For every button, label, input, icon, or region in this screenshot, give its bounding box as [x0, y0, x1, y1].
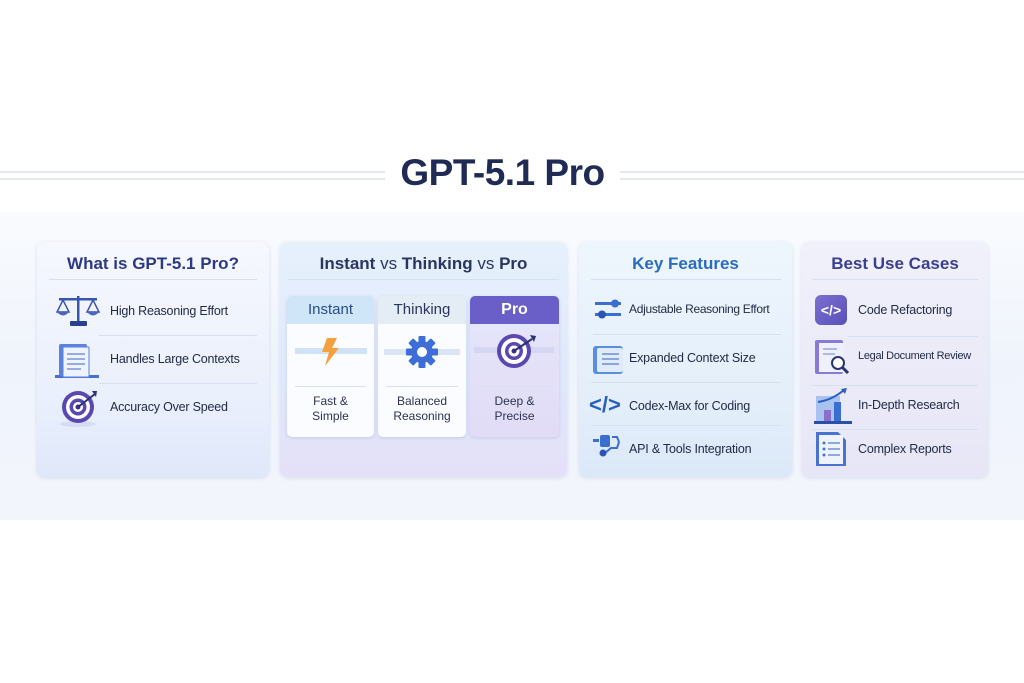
panel: Key Features: [579, 242, 792, 477]
item: Legal Document Review: [858, 350, 971, 362]
icon: code: </>: [589, 392, 621, 417]
text: [393, 394, 451, 423]
icon: code box: </>: [821, 302, 841, 318]
column: Thinking: [378, 296, 466, 437]
column: Pro: [470, 296, 559, 437]
icon: lightning: [295, 338, 367, 366]
item: high reasoning: High Reasoning Effort: [110, 304, 228, 318]
text: [312, 394, 349, 423]
column: Thinking: Thinking: [394, 301, 450, 318]
icon: api: [593, 435, 620, 456]
item: Adjustable Reasoning Effort: [629, 302, 769, 316]
text: Balanced: [397, 394, 447, 408]
item: In-Depth Research: [858, 398, 960, 412]
panel: Instant vs Thinking vs Pro: [280, 242, 567, 477]
icon: legal doc: [815, 340, 849, 374]
column: Pro: Pro: [501, 301, 528, 318]
heading: Key Features: [632, 254, 739, 273]
text: Deep &: [494, 394, 535, 408]
column: Instant: [287, 296, 374, 437]
column: Instant: Instant: [308, 301, 353, 318]
text: Precise: [494, 409, 534, 423]
title rule right: [620, 171, 1024, 180]
item: Expanded Context Size: [629, 351, 755, 365]
icon: doc: [593, 346, 623, 374]
item: accuracy: Accuracy Over Speed: [110, 400, 228, 414]
heading: Instant vs Thinking vs Pro: [320, 254, 527, 273]
item: Complex Reports: [858, 442, 952, 456]
panel: What is GPT-5.1 Pro: [37, 242, 269, 477]
icon: code box: [815, 295, 847, 325]
title rule left: [0, 171, 385, 180]
icon: chart: [814, 388, 852, 424]
item: Code Refactoring: [858, 303, 952, 317]
panel: Best Use Cases: [802, 242, 988, 477]
heading: Best Use Cases: [831, 254, 959, 273]
title: GPT-5.1 Pro: [400, 152, 605, 193]
text: Simple: [312, 409, 349, 423]
text: [494, 394, 535, 423]
background band: [0, 212, 1024, 520]
icon: target: [60, 391, 97, 427]
icon: sliders: [595, 300, 621, 318]
item: large contexts: Handles Large Contexts: [110, 352, 240, 366]
text: Reasoning: [393, 409, 451, 423]
heading: What is GPT-5.1 Pro?: [67, 254, 239, 273]
text: Fast &: [313, 394, 348, 408]
icon: scales: [56, 296, 100, 326]
icon: target: [474, 334, 554, 368]
item: Codex-Max for Coding: [629, 399, 750, 413]
icon: document: [55, 344, 99, 378]
icon: report: [816, 432, 846, 466]
item: API & Tools Integration: [629, 442, 751, 456]
icon: gear: [384, 336, 460, 368]
